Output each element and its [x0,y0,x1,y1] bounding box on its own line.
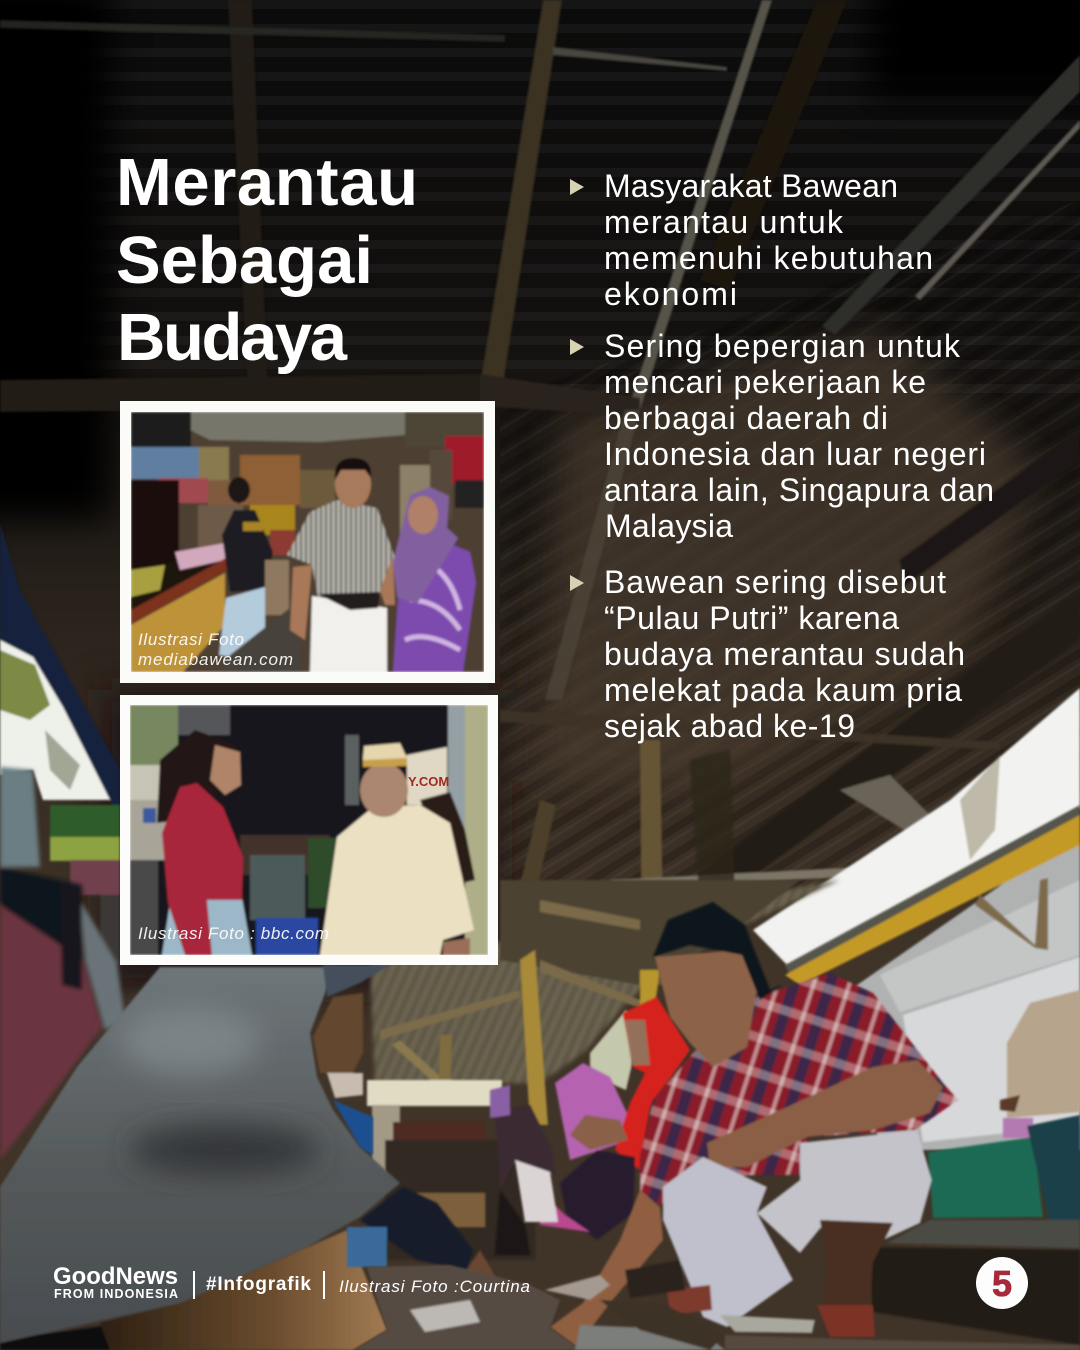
photo 1 credit: Ilustrasi Foto [138,630,244,649]
man in dark jacket [219,477,273,660]
title: Budaya [117,300,348,375]
photo 1 credit [138,630,293,669]
fish and mat on the ground [355,1265,1080,1350]
right wall [448,705,466,840]
shop sign lettering: Y.COM [408,774,449,789]
bullet 2: berbagai daerah di [604,400,888,436]
bullet 1 [570,168,933,312]
left roof edge, sky and foliage [0,523,120,965]
bullet 3: budaya merantau sudah [604,636,965,672]
man in striped shirt [287,458,395,672]
background stall [240,835,330,875]
bullet 1: merantau untuk [604,204,844,240]
bullet 3 [570,564,965,744]
background vendors [490,997,690,1255]
photo 1: shop owner couple in a grocery store [120,401,495,683]
far roof structure [367,880,840,1260]
GoodNews logo: FROM INDONESIA [54,1287,178,1301]
left foreground woman in floral cloth [0,767,125,1160]
main vendor in plaid shirt [550,902,958,1347]
shelves [131,447,199,479]
head [655,950,757,1067]
woman in purple dress [393,487,476,672]
page number badge: 5 [992,1263,1012,1304]
bullet 2 [570,328,994,544]
bullet 3: sejak abad ke-19 [604,708,855,744]
bullet 1: ekonomi [604,276,737,312]
footer branding [53,1263,530,1301]
photo credit: Ilustrasi Foto :Courtina [339,1277,530,1296]
right background worker and tubs [867,990,1080,1345]
right building and yellow beam [785,805,1080,1150]
bullet 2: Indonesia dan luar negeri [604,436,986,472]
bullet 3: melekat pada kaum pria [604,672,962,708]
bullet 2: Malaysia [605,508,733,544]
photo 2: woman in red jacket and older man in cream shirt [120,695,498,965]
page number badge [976,1257,1028,1309]
bullet 1: memenuhi kebutuhan [604,240,933,276]
arm [707,1060,943,1167]
right sky [753,688,1080,968]
foreground woman in grey hijab [0,965,520,1350]
shop sign [407,747,447,805]
plastic bag [663,1157,793,1327]
coca-cola fridge [445,436,484,484]
photo 2 credit: Ilustrasi Foto : bbc.com [138,924,329,943]
title: Sebagai [116,223,373,298]
title: Merantau [116,145,418,220]
bullet 2: mencari pekerjaan ke [604,364,926,400]
hashtag: #Infografik [206,1274,311,1295]
bullet 2: Sering bepergian untuk [604,328,961,364]
roof beams [0,0,1080,985]
cashier [131,480,179,570]
store ceiling [185,412,405,442]
GoodNews logo: GoodNews [53,1263,178,1290]
bullet 2: antara lain, Singapura dan [604,472,994,508]
trousers [757,1130,932,1253]
cart [265,560,289,615]
bullet 1: Masyarakat Bawean [604,168,898,204]
photo 1 credit: mediabawean.com [138,650,293,669]
street and plants [130,705,178,765]
counter [131,558,227,624]
bullet 3: Bawean sering disebut [604,564,946,600]
bullet 3: “Pulau Putri” karena [604,600,899,636]
bullet list [570,168,994,744]
man [320,743,474,955]
title [116,145,418,375]
woman [157,730,252,955]
